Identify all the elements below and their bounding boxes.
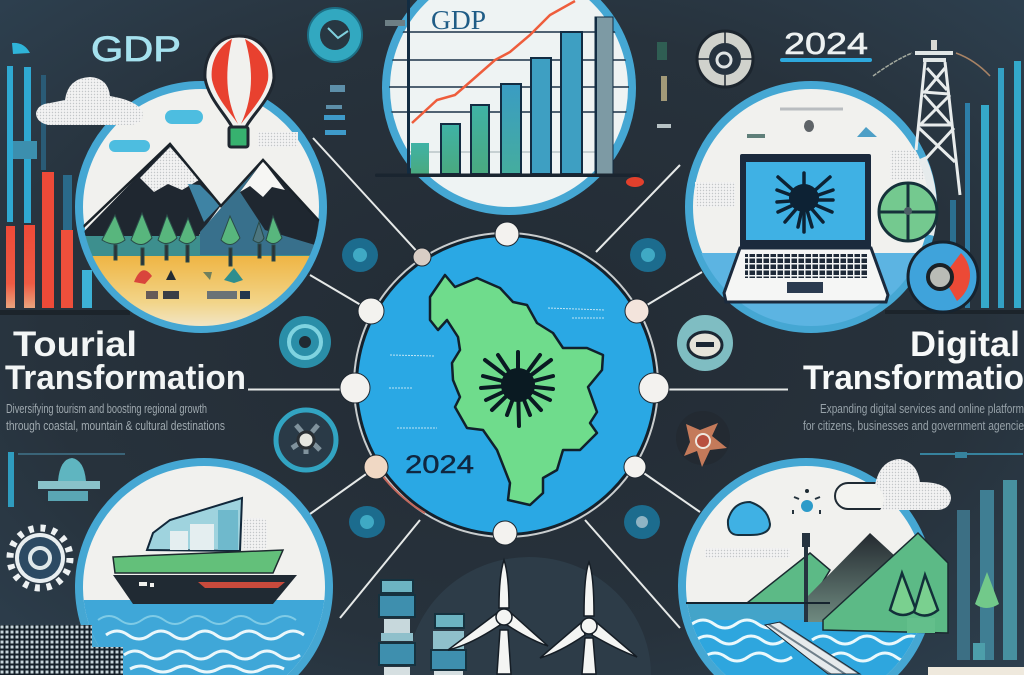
heading: digital transformation: Digital [910,325,1020,364]
icon: hat panel [8,452,125,507]
icon: lattice tower [873,40,990,195]
icon: ship [113,498,297,604]
tourism circle [70,85,340,340]
icon: cloud [36,77,143,125]
network nodes [340,222,669,545]
heading: digital transformation: Transformatio [803,359,1024,397]
icon: eagle on screen [777,173,833,232]
central circle [354,233,658,537]
laptop circle [685,85,945,343]
icon: blue pond shape [728,502,770,535]
heading: tourism transformation [5,325,246,397]
icon: wind turbine [540,562,637,674]
icon: gear top right [697,31,753,87]
map of Albania [430,275,603,505]
icon: laptop [724,154,888,302]
small bars left of GDP circle [324,85,346,135]
icon: teal emblem lower right [624,505,660,539]
right bar chart [885,61,1024,314]
icon: teal emblem upper left [342,238,378,272]
icon: teal emblem lower left [349,506,385,538]
left description: Diversifying tourism and boosting regional growth [6,401,207,416]
right description [803,401,1024,433]
dotted solar panel [0,625,123,675]
icon: eagle on map [481,352,553,426]
icon: right emblem lower [676,411,730,467]
ship circle [70,458,340,675]
wind and buildings [379,557,651,675]
connector lines [248,138,788,628]
icon: trees [102,213,282,266]
faint side marks [385,20,671,128]
left bar chart [0,43,130,315]
small teal icons around the hub [342,238,666,539]
heading: tourism transformation: Tourial [13,325,137,364]
heading: digital transformation [803,325,1024,397]
icon: small figure [793,489,820,514]
icon: wind turbine [448,560,548,674]
right industrial panel [920,452,1024,675]
icon: hot air balloon [205,36,274,147]
left description: through coastal, mountain & cultural destinations [6,418,225,433]
icon: mountains with trees [686,533,948,633]
left description [6,401,225,433]
icon: pier [765,622,860,674]
heading: tourism transformation: Transformation [5,359,246,397]
icon: green compass [879,183,937,241]
chart heading: GDP [431,5,486,35]
icon: teal gear emblem [276,410,336,470]
icon: people on beach [134,268,250,299]
icon: top left dial [308,8,362,62]
bar chart [411,17,613,174]
year label: 2024 [784,26,868,61]
icon: cloud right [835,459,951,510]
icon: building stacks [379,580,466,675]
icon: cog [10,528,70,588]
icon: teal emblem upper right [630,238,666,272]
icon: target left [279,316,331,368]
map label: 2024 [405,451,474,479]
hill backdrop [407,557,651,675]
hill landscape circle [678,458,948,675]
GDP chart circle [375,0,644,211]
GDP label left: GDP [91,30,181,69]
icon: right emblem upper [677,315,733,371]
icon: pie gauge [908,242,978,312]
